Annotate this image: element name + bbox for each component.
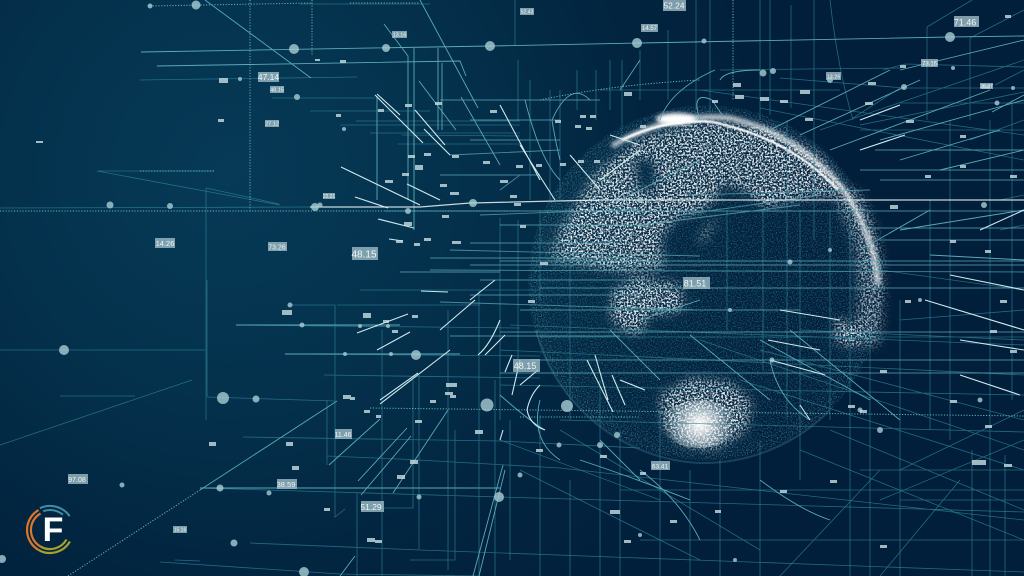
globe ocean speckle (528, 105, 884, 461)
logo: F mark with coloured rings (27, 506, 70, 553)
globe: particle sphere with continents (528, 105, 884, 463)
bright north arc (622, 121, 838, 190)
value tag: 73.26: 73.26 (268, 244, 286, 252)
lower-left globe rim (536, 330, 830, 463)
globe continents (546, 120, 871, 450)
antarctic glow (662, 400, 738, 448)
value tag: 81.51 (683, 277, 710, 289)
value tag: 51.29: 51.29 (360, 502, 382, 512)
value tag: 27.12: 27.12 (265, 122, 279, 128)
value tag: 52.24: 52.24 (663, 0, 685, 10)
value tag: 81.51: 81.51 (684, 278, 706, 288)
value tag: 13.26: 13.26 (827, 74, 840, 80)
bright white streak lines (310, 94, 1024, 440)
value tag: 26.37: 26.37 (980, 84, 993, 90)
value tag: 48.15 upper: 48.15 (270, 88, 284, 94)
value tag: 73.26 (268, 242, 287, 252)
value tag: 48.15 middle: 48.15 (351, 250, 377, 260)
polar rim highlight (612, 117, 878, 285)
value tag: 15.16: 15.16 (174, 528, 186, 534)
value tag: 97.08: 97.08 (68, 477, 86, 484)
value tag: 52.43: 52.43 (521, 10, 533, 16)
value tag: 73.16 (921, 59, 938, 68)
value tag: 38.59: 38.59 (277, 480, 295, 489)
value tag: 48.15 lower: 48.15 (514, 361, 536, 371)
value tag: 14.26: 14.26 (156, 239, 174, 248)
bright north pole spot (656, 113, 696, 125)
value tag: 13.26 (826, 72, 841, 80)
value tag: 13.16: 13.16 (393, 32, 406, 38)
value tag: 97.08 (68, 474, 88, 484)
value tag: 22.21: 22.21 (323, 194, 335, 200)
value tag: 63.41: 63.41 (652, 464, 669, 470)
value tag: 71.46: 71.46 (954, 18, 976, 28)
value tag: 47.14: 47.14 (258, 72, 279, 82)
logo: F mark with coloured rings: F (43, 511, 63, 549)
value tag: 14.57: 14.57 (642, 26, 658, 32)
value tag: 48.15 lower (513, 359, 540, 372)
value tag: 14.57 (641, 24, 658, 32)
value tag: 11.46 (334, 429, 352, 439)
value tag: 73.16: 73.16 (922, 62, 938, 68)
value tag: 11.46: 11.46 (334, 432, 352, 439)
value tag: 63.41 (651, 461, 670, 470)
